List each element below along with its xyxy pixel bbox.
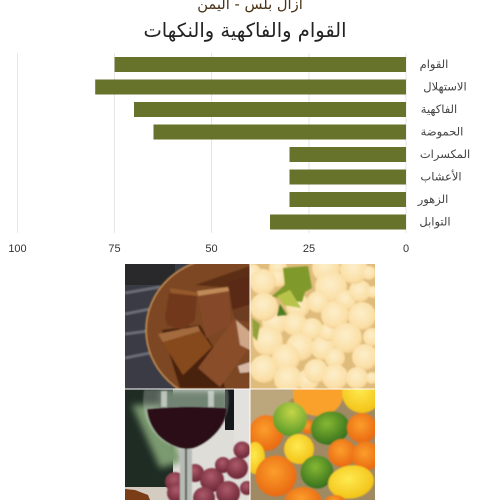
value axis labels: [8, 243, 409, 255]
photo: chocolate in copper bowl: [125, 264, 250, 388]
photo: citrus on burlap: [250, 390, 375, 500]
category labels: [417, 57, 470, 230]
bars: [95, 57, 406, 230]
value axis labels: 75: [108, 243, 121, 255]
category labels: القوام: [420, 57, 448, 72]
value axis labels: 25: [303, 243, 315, 255]
category labels: الاستهلال: [423, 80, 467, 94]
category labels: التوابل: [419, 214, 451, 230]
category labels: الأعشاب: [420, 170, 462, 184]
value axis labels: 50: [205, 243, 218, 255]
bar chart: [8, 53, 470, 255]
title: القوام والفاكهية والنكهات: [143, 19, 347, 42]
category labels: المكسرات: [420, 147, 470, 162]
value axis labels: 100: [8, 243, 27, 255]
photo: white grapes: [250, 264, 375, 388]
photo: red wine glass and grapes: [125, 389, 254, 500]
category labels: الحموضة: [421, 124, 463, 140]
category labels: الفاكهية: [421, 102, 457, 116]
category labels: الزهور: [417, 192, 448, 207]
value axis labels: 0: [403, 243, 409, 255]
